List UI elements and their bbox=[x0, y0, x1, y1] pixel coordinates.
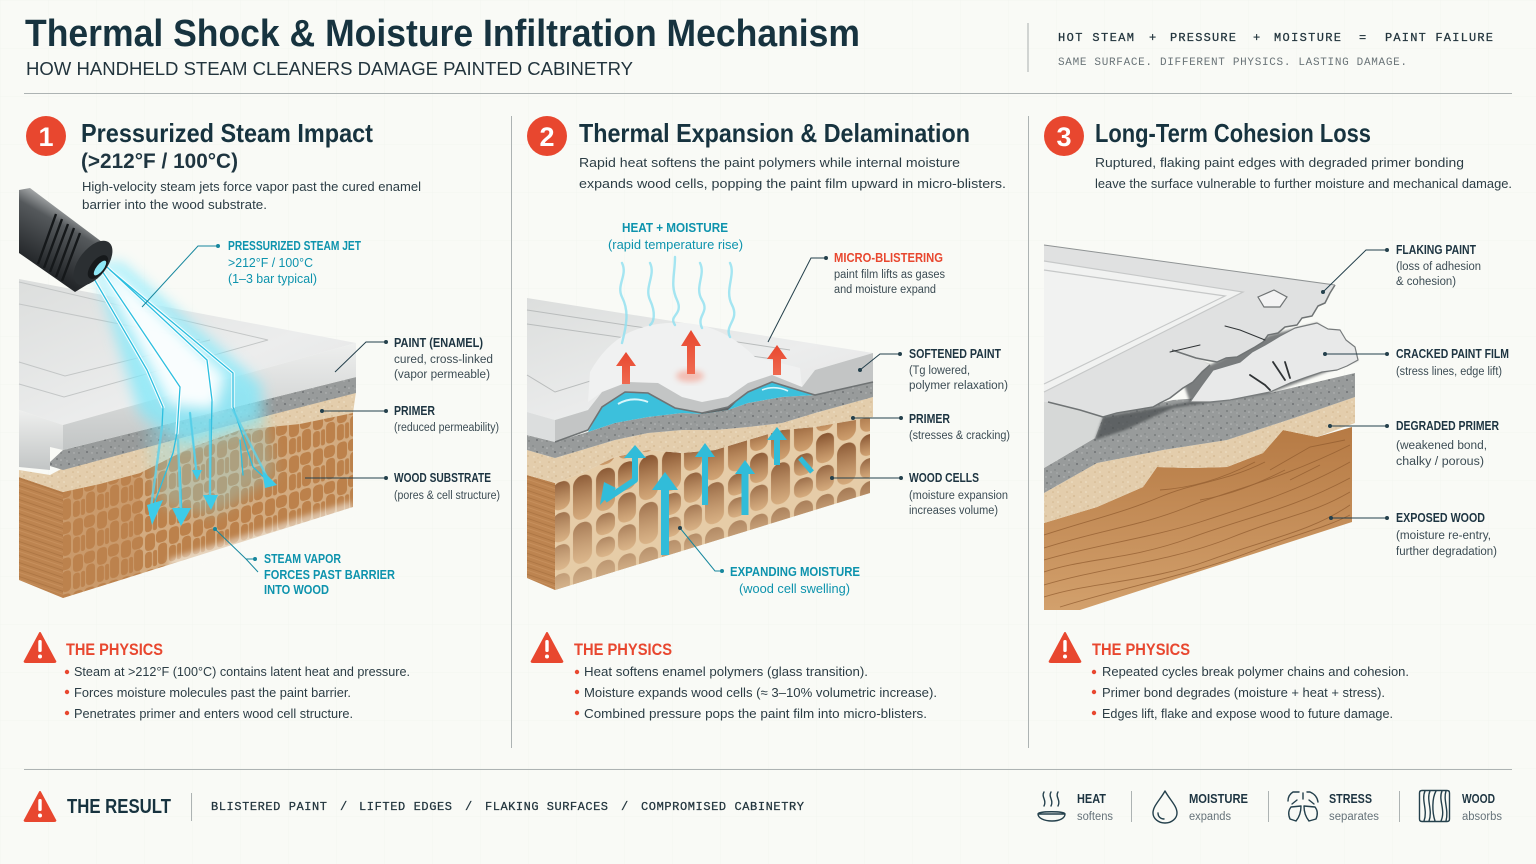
leader lines 1 bbox=[142, 244, 388, 572]
legend: heat: HEAT bbox=[1077, 792, 1106, 806]
callout: micro-blistering: paint film lifts as gases bbox=[834, 269, 945, 281]
callout: expanding moisture bbox=[730, 565, 860, 596]
paint top surface bbox=[527, 298, 873, 420]
result list: / bbox=[621, 800, 628, 814]
callout: wood cells: WOOD CELLS bbox=[909, 471, 979, 485]
callout: exposed wood: EXPOSED WOOD bbox=[1396, 511, 1485, 525]
red arrows bbox=[616, 330, 787, 384]
wood left face bbox=[527, 475, 555, 590]
callout: degraded primer: (weakened bond, bbox=[1396, 440, 1487, 452]
heading 1: Pressurized Steam Impact bbox=[81, 118, 373, 148]
paint top surface bbox=[19, 279, 356, 425]
header equation: PAINT FAILURE bbox=[1385, 31, 1493, 45]
panel: physics 3 bbox=[1050, 633, 1409, 721]
header equation: SAME SURFACE. DIFFERENT PHYSICS. LASTING DAMAGE. bbox=[1058, 57, 1407, 69]
exposed grey primer bbox=[1044, 373, 1355, 493]
wood cell face bbox=[555, 417, 870, 590]
callout: cracked paint film bbox=[1396, 347, 1509, 378]
callout: exposed wood: (moisture re-entry, bbox=[1396, 530, 1491, 542]
blister hump bbox=[588, 323, 802, 402]
panel: step 2 heading bbox=[527, 116, 1006, 191]
callout: steam vapor: INTO WOOD bbox=[264, 583, 329, 597]
moisture pockets bbox=[588, 382, 815, 432]
panel: physics 1 bbox=[25, 633, 410, 721]
description 2 bbox=[579, 155, 1006, 191]
moisture arrows bbox=[605, 437, 812, 555]
warning icon bbox=[25, 792, 55, 821]
nozzle bbox=[19, 188, 120, 292]
primer sand band bbox=[527, 397, 873, 483]
physics bullets bbox=[575, 664, 937, 721]
warning icon bbox=[1050, 633, 1080, 662]
panel: diagram 1 steam jet cross-section bbox=[19, 188, 388, 598]
legend: heat: softens bbox=[1077, 811, 1113, 823]
header equation: PRESSURE bbox=[1170, 31, 1236, 45]
physics bullets bbox=[65, 664, 410, 721]
result list: BLISTERED PAINT bbox=[211, 800, 327, 814]
softened paint front bbox=[555, 353, 873, 442]
callout: cracked paint film: (stress lines, edge lift) bbox=[1396, 366, 1502, 378]
number badge 3: 3 bbox=[1056, 122, 1072, 152]
physics bullets: Forces moisture molecules past the paint barrier. bbox=[74, 685, 351, 700]
main paint film bbox=[1044, 245, 1335, 417]
legend: wood: absorbs bbox=[1462, 811, 1502, 823]
callout: micro-blistering: MICRO-BLISTERING bbox=[834, 251, 943, 265]
callout: primer 1: PRIMER bbox=[394, 404, 435, 418]
callout: cracked paint film: CRACKED PAINT FILM bbox=[1396, 347, 1509, 361]
physics heading: THE PHYSICS bbox=[66, 641, 163, 659]
callout: softened paint: SOFTENED PAINT bbox=[909, 347, 1001, 361]
callout: flaking paint: FLAKING PAINT bbox=[1396, 243, 1476, 257]
panel: physics 2 bbox=[532, 633, 937, 721]
callout: primer 2: PRIMER bbox=[909, 412, 950, 426]
callout: pressurized steam jet: (1–3 bar typical) bbox=[228, 272, 317, 286]
panel: diagram 2 blister cross-section bbox=[527, 256, 903, 590]
panel: diagram 3 flaking cross-section bbox=[1044, 245, 1389, 610]
callout: flaking paint: & cohesion) bbox=[1396, 276, 1456, 288]
callout: wood substrate: (pores & cell structure) bbox=[394, 490, 500, 502]
wood left face bbox=[19, 477, 63, 598]
description 1 bbox=[82, 179, 421, 212]
description 1: barrier into the wood substrate. bbox=[82, 197, 267, 212]
callout: pressurized steam jet: >212°F / 100°C bbox=[228, 256, 313, 270]
callout: primer 2 bbox=[909, 412, 1010, 442]
callout: primer 1: (reduced permeability) bbox=[394, 422, 499, 434]
header equation: + bbox=[1149, 31, 1156, 45]
header equation: = bbox=[1359, 31, 1366, 45]
icon: wood grain block bbox=[1420, 790, 1450, 822]
physics bullets: Primer bond degrades (moisture + heat + stress). bbox=[1102, 685, 1385, 700]
callout: pressurized steam jet: PRESSURIZED STEAM JET bbox=[228, 239, 361, 253]
legend: stress: STRESS bbox=[1329, 792, 1372, 806]
icon: heat bowl bbox=[1038, 792, 1065, 821]
result list: LIFTED EDGES bbox=[359, 800, 452, 814]
callout: heat + moisture: (rapid temperature rise) bbox=[608, 238, 743, 252]
legend: wood bbox=[1420, 790, 1502, 823]
callout: flaking paint: (loss of adhesion bbox=[1396, 261, 1481, 273]
physics bullets: Combined pressure pops the paint film into micro-blisters. bbox=[584, 706, 927, 721]
callout: paint enamel: PAINT (ENAMEL) bbox=[394, 336, 483, 350]
description 3: Ruptured, flaking paint edges with degraded primer bonding bbox=[1095, 155, 1464, 170]
physics bullets bbox=[1092, 664, 1409, 721]
primer sand band bbox=[19, 392, 356, 492]
callout: degraded primer: chalky / porous) bbox=[1396, 456, 1484, 468]
leader lines 3 bbox=[1321, 248, 1389, 520]
callout: wood substrate bbox=[394, 471, 500, 502]
number badge 1 bbox=[26, 116, 66, 156]
header equation bbox=[1028, 23, 1493, 72]
callout: paint enamel bbox=[394, 336, 493, 381]
callout: degraded primer bbox=[1396, 419, 1499, 468]
cracks bbox=[1170, 326, 1290, 390]
legend: stress bbox=[1288, 792, 1379, 823]
under-flake shadow bbox=[1095, 323, 1358, 440]
result heading: THE RESULT bbox=[67, 796, 171, 818]
description 3 bbox=[1095, 155, 1512, 191]
paint side faces bbox=[63, 343, 356, 450]
physics heading: THE PHYSICS bbox=[1092, 641, 1190, 659]
header equation: + bbox=[1253, 31, 1260, 45]
physics bullets: Edges lift, flake and expose wood to future damage. bbox=[1102, 706, 1393, 721]
callout: softened paint: (Tg lowered, bbox=[909, 365, 970, 377]
exposed wood bbox=[1044, 427, 1352, 610]
paint side strip bbox=[1044, 400, 1103, 468]
legend: moisture: expands bbox=[1189, 811, 1231, 823]
callout: heat + moisture bbox=[608, 221, 743, 252]
heat waves bbox=[620, 257, 734, 343]
callout: micro-blistering: and moisture expand bbox=[834, 284, 936, 296]
description 2: expands wood cells, popping the paint film upward in micro-blisters. bbox=[579, 176, 1006, 191]
number badge 2 bbox=[527, 116, 567, 156]
callout: wood cells: (moisture expansion bbox=[909, 490, 1008, 502]
lifted second flake bbox=[1190, 323, 1358, 402]
description 2: Rapid heat softens the paint polymers while internal moisture bbox=[579, 155, 960, 170]
steam jet lines bbox=[93, 267, 270, 517]
physics bullets: Penetrates primer and enters wood cell structure. bbox=[74, 706, 353, 721]
callout: degraded primer: DEGRADED PRIMER bbox=[1396, 419, 1499, 433]
recessed panel bbox=[1044, 261, 1243, 392]
legend: wood: WOOD bbox=[1462, 792, 1495, 806]
description 3: leave the surface vulnerable to further moisture and mechanical damage. bbox=[1095, 176, 1512, 191]
number badge 3 bbox=[1044, 116, 1084, 156]
callout: primer 1 bbox=[394, 404, 499, 434]
degraded primer sand bbox=[1044, 397, 1355, 523]
legend: moisture bbox=[1153, 791, 1248, 823]
panel: step 1 heading bbox=[26, 116, 421, 212]
description 1: High-velocity steam jets force vapor past the cured enamel bbox=[82, 179, 421, 194]
heading 3: Long-Term Cohesion Loss bbox=[1095, 118, 1371, 148]
physics bullets: Moisture expands wood cells (≈ 3–10% volumetric increase). bbox=[584, 685, 937, 700]
callout: steam vapor: FORCES PAST BARRIER bbox=[264, 568, 395, 582]
heading 2: Thermal Expansion & Delamination bbox=[579, 118, 970, 148]
heat glow bbox=[676, 370, 704, 382]
legend: moisture: MOISTURE bbox=[1189, 792, 1248, 806]
result list: FLAKING SURFACES bbox=[485, 800, 608, 814]
legend: stress: separates bbox=[1329, 811, 1379, 823]
callout: exposed wood: further degradation) bbox=[1396, 546, 1497, 558]
result list: / bbox=[340, 800, 347, 814]
callout: softened paint bbox=[909, 347, 1008, 392]
result list: / bbox=[465, 800, 472, 814]
subtitle: HOW HANDHELD STEAM CLEANERS DAMAGE PAINTED CABINETRY bbox=[26, 59, 633, 79]
result list: COMPROMISED CABINETRY bbox=[641, 800, 804, 814]
callout: softened paint: polymer relaxation) bbox=[909, 380, 1008, 392]
number badge 1: 1 bbox=[38, 122, 54, 152]
callout: primer 2: (stresses & cracking) bbox=[909, 430, 1010, 442]
panel: the result bbox=[25, 792, 804, 821]
primer grey band bbox=[527, 382, 873, 458]
callout: paint enamel: cured, cross-linked bbox=[394, 354, 493, 366]
wood grain bbox=[1044, 440, 1350, 607]
callout: steam vapor: STEAM VAPOR bbox=[264, 552, 341, 566]
callout: heat + moisture: HEAT + MOISTURE bbox=[622, 221, 728, 235]
physics bullets: Heat softens enamel polymers (glass transition). bbox=[584, 664, 868, 679]
callout: micro-blistering bbox=[834, 251, 945, 296]
callout: exposed wood bbox=[1396, 511, 1497, 558]
icon: separating pieces bbox=[1288, 792, 1318, 821]
panel: step 3 heading bbox=[1044, 116, 1512, 191]
result list bbox=[211, 800, 804, 814]
callout: wood cells bbox=[909, 471, 1008, 517]
physics bullets: Repeated cycles break polymer chains and cohesion. bbox=[1102, 664, 1409, 679]
steam glow bbox=[95, 262, 275, 515]
warning icon bbox=[532, 633, 562, 662]
wood cell face bbox=[63, 411, 353, 598]
loose flake bbox=[1258, 290, 1287, 307]
legend: heat bbox=[1038, 792, 1113, 823]
leader lines 2 bbox=[678, 256, 903, 573]
callout: steam vapor bbox=[264, 552, 395, 597]
header equation: MOISTURE bbox=[1274, 31, 1341, 45]
warning icon bbox=[25, 633, 55, 662]
number badge 2: 2 bbox=[539, 122, 555, 152]
header equation: HOT STEAM bbox=[1058, 31, 1134, 45]
physics bullets: Steam at >212°F (100°C) contains latent heat and pressure. bbox=[74, 664, 410, 679]
icon: water drop bbox=[1153, 791, 1177, 823]
callout: pressurized steam jet bbox=[228, 239, 361, 286]
vapor arrow heads bbox=[147, 470, 277, 526]
heading 1 subline: (>212°F / 100°C) bbox=[81, 150, 238, 173]
physics heading: THE PHYSICS bbox=[574, 641, 672, 659]
callout: paint enamel: (vapor permeable) bbox=[394, 369, 490, 381]
callout: expanding moisture: EXPANDING MOISTURE bbox=[730, 565, 860, 579]
callout: flaking paint bbox=[1396, 243, 1481, 288]
callout: expanding moisture: (wood cell swelling) bbox=[739, 582, 850, 596]
callout: wood cells: increases volume) bbox=[909, 505, 998, 517]
title: Thermal Shock & Moisture Infiltration Mechanism bbox=[25, 13, 860, 55]
primer grey band bbox=[50, 377, 356, 470]
callout: wood substrate: WOOD SUBSTRATE bbox=[394, 471, 491, 485]
